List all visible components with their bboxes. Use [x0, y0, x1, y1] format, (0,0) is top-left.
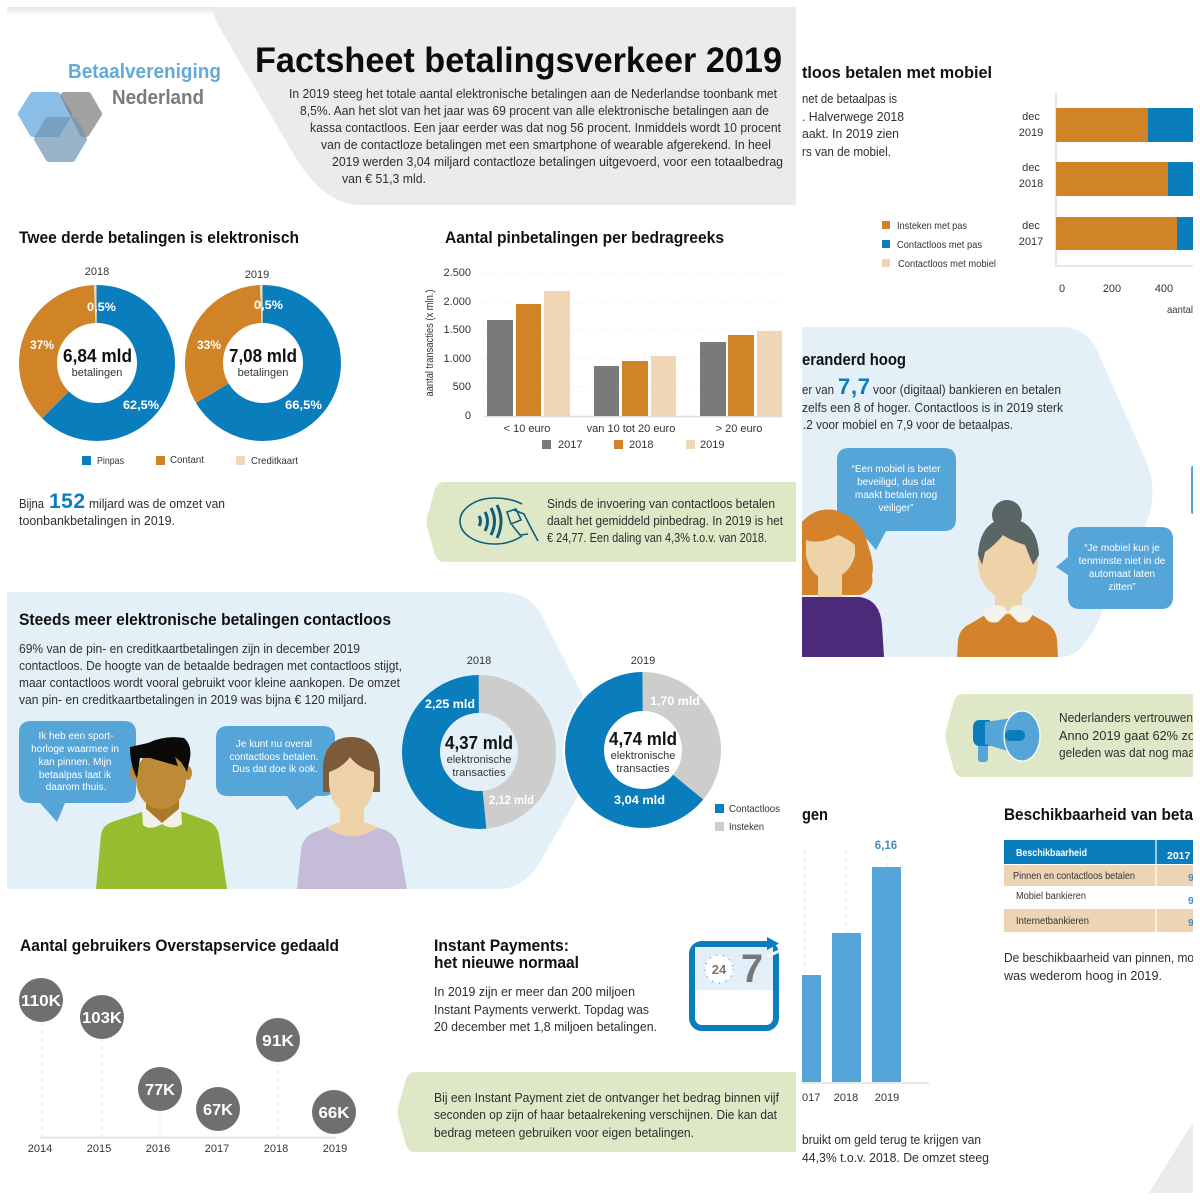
icon: megaphone: [973, 711, 1040, 762]
panel: overstapservice: [19, 936, 356, 1155]
stacked bar chart: 200: [1103, 283, 1121, 295]
body text: In 2019 zijn er meer dan 200 miljoen: [434, 984, 635, 999]
callout text: bedrag meteen gebruiken voor eigen betalingen.: [434, 1125, 694, 1140]
speech bubble: beter beveiligd: maakt betalen nog: [855, 490, 937, 501]
donut 2018: betalingen: [72, 367, 122, 379]
text: omzet toonbankbetalingen: miljard was de omzet van: [89, 496, 225, 511]
bubble timeline chart: 2014: [28, 1143, 52, 1155]
legend: Insteken: [729, 821, 764, 833]
body text: net de betaalpas is: [802, 91, 897, 106]
bar chart: 0: [465, 410, 471, 422]
text: omzet toonbankbetalingen: 152: [49, 490, 85, 513]
bubble timeline chart: 67K: [203, 1102, 233, 1119]
legend: Contactloos met pas: [897, 239, 982, 251]
donut 2018 contactloos: 2,25 mld: [425, 697, 475, 711]
stacked bar chart: [1019, 93, 1193, 316]
bar chart: 2019: [700, 439, 724, 451]
callout text: daalt het gemiddeld pinbedrag. In 2019 is het: [547, 513, 783, 528]
body text: [19, 641, 402, 707]
bar chart: 500: [453, 381, 471, 393]
heading: [434, 936, 579, 972]
intro text: van de contactloze betalingen met een smartphone of wearable afgerekend. In heel: [321, 137, 771, 152]
speech bubble: beter beveiligd: beveiligd, dus dat: [857, 477, 935, 488]
panel: donuts contactloos: [421, 655, 780, 833]
bar chart: 2017: [558, 439, 582, 451]
person: woman with grey hair: [957, 500, 1058, 657]
intro text: 2019 werden 3,04 miljard contactloze betalingen uitgevoerd, voor een totaalbedrag: [332, 154, 783, 169]
donut 2019: [197, 269, 322, 422]
bar chart: > 20 euro: [716, 423, 762, 435]
intro text: In 2019 steeg het totale aantal elektronische betalingen aan de Nederlandse toonbank met: [289, 86, 777, 101]
callout: vertrouwen: [946, 694, 1196, 777]
body text: er van: [802, 382, 834, 397]
donut 2019: 66,5%: [285, 398, 322, 412]
body text: 44,3% t.o.v. 2018. De omzet steeg: [802, 1150, 989, 1165]
donut 2018 contactloos: transacties: [452, 767, 506, 779]
callout text: [434, 1090, 779, 1140]
legend: [882, 220, 996, 270]
callout text: [1059, 710, 1196, 760]
icon: 24/7 calendar: 24: [712, 962, 727, 977]
donut 2018 contactloos: 2018: [467, 655, 491, 667]
body text: bruikt om geld terug te krijgen van: [802, 1132, 981, 1147]
heading: Steeds meer elektronische betalingen contactloos: [19, 610, 391, 629]
table: Beschikbaarheid: [1016, 848, 1087, 859]
panel: header: [212, 7, 796, 205]
table: Internetbankieren: [1016, 915, 1089, 927]
bubble timeline chart: 2018: [264, 1143, 288, 1155]
stacked bar chart: dec: [1022, 162, 1040, 174]
callout: uitleg instant payment: [398, 1072, 796, 1152]
bar chart: 2019: [875, 1092, 899, 1104]
speech bubble: sporthorloge: [19, 721, 136, 822]
donut 2018 contactloos: 4,37 mld: [445, 733, 513, 753]
body text: 20 december met 1,8 miljoen betalingen.: [434, 1019, 657, 1034]
donut 2019: 2019: [245, 269, 269, 281]
speech bubble: overal contactloos: Dus dat doe ik ook.: [232, 764, 318, 775]
donut 2019 contactloos: 3,04 mld: [614, 793, 665, 807]
donut 2019 contactloos: 2019: [631, 655, 655, 667]
donut 2019 contactloos: elektronische: [611, 750, 675, 762]
bubble timeline chart: 110K: [21, 993, 61, 1010]
bubble timeline chart: 2017: [205, 1143, 229, 1155]
bar chart: < 10 euro: [504, 423, 550, 435]
body text: [1004, 952, 1193, 982]
callout text: Bij een Instant Payment ziet de ontvanger het bedrag binnen vijf: [434, 1090, 779, 1105]
bubble timeline chart: [19, 978, 356, 1155]
body text: zelfs een 8 of hoger. Contactloos is in 2019 sterk: [802, 400, 1063, 415]
speech bubble: beter beveiligd: “Een mobiel is beter: [852, 464, 941, 475]
speech bubble: sporthorloge: horloge waarmee in: [31, 744, 119, 755]
stacked bar chart: 0: [1059, 283, 1065, 295]
body text: [802, 91, 904, 159]
body text: aakt. In 2019 zien: [802, 126, 899, 141]
speech bubble: sporthorloge: betaalpas laat ik: [39, 770, 112, 781]
legend: Contant: [170, 454, 204, 466]
body text: voor (digitaal) bankieren en betalen: [873, 382, 1061, 397]
callout text: € 24,77. Een daling van 4,3% t.o.v. van 2018.: [547, 530, 767, 545]
speech bubble: overal contactloos: Je kunt nu overal: [236, 739, 312, 750]
bubble timeline chart: 77K: [145, 1082, 175, 1099]
donut 2019: 33%: [197, 338, 221, 352]
icon: 24/7 calendar: [692, 937, 784, 1028]
callout text: [547, 496, 783, 545]
speech bubble: beter beveiligd: veiliger”: [878, 503, 914, 514]
speech bubble: beter beveiligd: [837, 448, 956, 550]
legend: [82, 454, 298, 467]
panel: instant payments: [434, 936, 784, 1034]
speech bubble: niet in automaat: [1056, 527, 1173, 609]
logo: Betaalvereniging Nederland: Betaalvereniging: [68, 61, 221, 83]
donut 2018: 62,5%: [123, 398, 159, 412]
body text: rs van de mobiel.: [802, 144, 891, 159]
person: woman with brown hair: [297, 737, 407, 889]
body text: Instant Payments verwerkt. Topdag was: [434, 1002, 649, 1017]
bubble timeline chart: 2015: [87, 1143, 111, 1155]
donut 2018 contactloos: elektronische: [447, 754, 511, 766]
table: 2017: [1167, 850, 1191, 862]
bubble timeline chart: 91K: [262, 1033, 294, 1050]
stacked bar chart: 2018: [1019, 178, 1043, 190]
panel: steeds meer contactloos: [7, 592, 595, 889]
speech bubble: sporthorloge: Ik heb een sport-: [38, 731, 114, 742]
table: Pinnen en contactloos betalen: [1013, 870, 1135, 882]
donut 2019 contactloos: transacties: [616, 763, 670, 775]
intro text: [289, 86, 783, 186]
callout: gemiddeld pinbedrag: [426, 482, 796, 562]
heading: eranderd hoog: [802, 350, 906, 369]
table: 9: [1188, 895, 1194, 907]
donut 2019: betalingen: [238, 367, 288, 379]
person: man: [96, 737, 227, 889]
legend: Contactloos: [729, 803, 780, 815]
heading: gen: [802, 805, 828, 824]
body text: 69% van de pin- en creditkaartbetalingen zijn in december 2019: [19, 641, 360, 656]
title: Factsheet betalingsverkeer 2019: [255, 41, 782, 80]
bar chart: 1.000: [443, 353, 471, 365]
text: omzet toonbankbetalingen: Bijna: [19, 496, 45, 511]
legend: Insteken met pas: [897, 220, 967, 232]
donut 2018: 6,84 mld: [63, 346, 132, 366]
bar chart: 017: [802, 1092, 820, 1104]
stacked bar chart: 2017: [1019, 236, 1043, 248]
donut 2018: 0,5%: [87, 300, 116, 314]
bar chart: 2018: [834, 1092, 858, 1104]
speech bubble: niet in automaat: tenminste niet in de: [1079, 556, 1166, 567]
logo: Betaalvereniging Nederland: Nederland: [112, 87, 204, 109]
bar chart: 2.000: [443, 296, 471, 308]
stacked bar chart: dec: [1022, 220, 1040, 232]
panel: bar chart geld terug: [802, 805, 989, 1165]
person: woman with red hair: [802, 510, 884, 657]
intro text: kassa contactloos. Een jaar eerder was dat nog 56 procent. Inmiddels wordt 10 procent: [310, 120, 781, 135]
callout text: Sinds de invoering van contactloos betalen: [547, 496, 775, 511]
intro text: 8,5%. Aan het slot van het jaar was 69 procent van alle elektronische betalingen aan de: [300, 103, 769, 118]
bar chart: [802, 840, 929, 1104]
callout text: seconden op zijn of haar betaalrekening verschijnen. Die kan dat: [434, 1107, 777, 1122]
table: 9: [1188, 872, 1194, 884]
bar chart: [424, 267, 783, 451]
bubble timeline chart: 2019: [323, 1143, 347, 1155]
legend: [715, 803, 780, 833]
body text: maar contactloos wordt vooral gebruikt voor kleine aankopen. De omzet: [19, 675, 400, 690]
bar chart: 6,16: [875, 840, 897, 852]
speech bubble: sporthorloge: kan pinnen. Mijn: [39, 757, 111, 768]
donut 2018: 37%: [30, 338, 54, 352]
table: Mobiel bankieren: [1016, 890, 1086, 902]
icon: 24/7 calendar: 7: [741, 947, 763, 991]
stacked bar chart: 400: [1155, 283, 1173, 295]
decorative corner shape: [1149, 1122, 1193, 1193]
panel: waardering onveranderd hoog: [802, 327, 1195, 657]
body text: . Halverwege 2018: [802, 109, 904, 124]
body text: [802, 374, 1063, 432]
donut 2018 contactloos: 2,12 mld: [489, 793, 534, 807]
donut 2019: 0,5%: [254, 298, 283, 312]
body text: [802, 1132, 989, 1165]
heading: Instant Payments:: [434, 936, 569, 955]
callout text: Anno 2019 gaat 62% zo: [1059, 728, 1195, 743]
table: 9: [1188, 917, 1194, 929]
donut 2019 contactloos: 1,70 mld: [650, 694, 700, 708]
panel: twee derde betalingen: [19, 228, 322, 528]
legend: Creditkaart: [251, 455, 298, 467]
text: omzet toonbankbetalingen: toonbankbetalingen in 2019.: [19, 513, 175, 528]
heading: Aantal gebruikers Overstapservice gedaald: [20, 936, 339, 955]
bar chart: 2018: [629, 439, 653, 451]
legend: Pinpas: [97, 455, 124, 467]
body text: .2 voor mobiel en 7,9 voor de betaalpas.: [803, 417, 1013, 432]
donut 2018: [30, 266, 159, 422]
icon: contactless payment: [460, 498, 538, 544]
bubble timeline chart: 66K: [318, 1105, 350, 1122]
donut 2019: 7,08 mld: [229, 346, 297, 366]
stacked bar chart: 2019: [1019, 127, 1043, 139]
bar chart: 2.500: [443, 267, 471, 279]
speech bubble: niet in automaat: zitten”: [1108, 582, 1136, 593]
intro text: van € 51,3 mld.: [342, 171, 426, 186]
donut 2018: 2018: [85, 266, 109, 278]
stacked bar chart: aantal: [1167, 304, 1193, 316]
body text: contactloos. De hoogte van de betaalde bedragen met contactloos stijgt,: [19, 658, 402, 673]
table: [1004, 840, 1194, 932]
bar chart: 1.500: [443, 324, 471, 336]
heading: tloos betalen met mobiel: [802, 63, 992, 82]
panel: pinbetalingen per bedragreeks: [424, 228, 783, 451]
speech bubble: niet in automaat: automaat laten: [1089, 569, 1155, 580]
body text: van pin- en creditkaartbetalingen in 2019 was bijna € 120 miljard.: [19, 692, 367, 707]
bubble timeline chart: 103K: [82, 1010, 122, 1027]
speech bubble: overal contactloos: [216, 726, 335, 810]
panel: contactloos betalen met mobiel: [802, 63, 1193, 316]
donut 2019 contactloos: 4,74 mld: [609, 729, 677, 749]
logo: Betaalvereniging Nederland: [22, 61, 221, 158]
bubble timeline chart: 2016: [146, 1143, 170, 1155]
panel: beschikbaarheid: [1003, 805, 1194, 983]
heading: het nieuwe normaal: [434, 953, 579, 972]
heading: Twee derde betalingen is elektronisch: [19, 228, 299, 247]
donut 2019 contactloos: [563, 655, 723, 830]
body text: was wederom hoog in 2019.: [1003, 968, 1162, 983]
bar chart: van 10 tot 20 euro: [587, 423, 675, 435]
speech bubble: sporthorloge: daarom thuis.: [46, 782, 106, 793]
body text: 7,7: [838, 374, 870, 399]
donut 2018 contactloos: [421, 655, 537, 810]
heading: Aantal pinbetalingen per bedragreeks: [445, 228, 724, 247]
stacked bar chart: dec: [1022, 111, 1040, 123]
bar chart: aantal transacties (x mln.): [424, 290, 436, 396]
speech bubble: overal contactloos: contactloos betalen.: [230, 752, 318, 763]
body text: [434, 984, 657, 1034]
text: omzet toonbankbetalingen: [19, 490, 225, 528]
speech bubble: niet in automaat: “Je mobiel kun je: [1084, 543, 1160, 554]
legend: Contactloos met mobiel: [898, 258, 996, 270]
